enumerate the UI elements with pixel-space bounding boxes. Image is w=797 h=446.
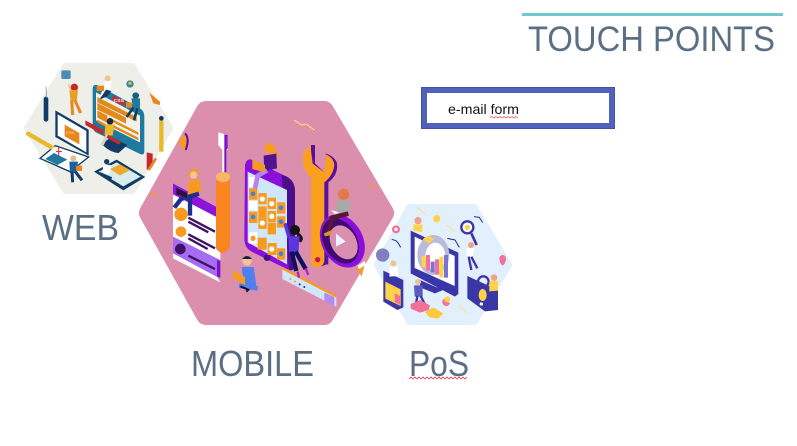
briefcase bbox=[467, 276, 498, 311]
heading: mobile: MOBILE bbox=[191, 343, 314, 384]
small icons bbox=[433, 215, 440, 222]
heading: pos: PoS bbox=[409, 343, 469, 384]
left app card bbox=[173, 183, 220, 278]
panel: mobile hexagon bbox=[149, 111, 384, 315]
magnifier bbox=[311, 207, 374, 275]
calculator bbox=[383, 271, 403, 310]
panel: pos hexagon bbox=[376, 207, 508, 321]
tablet bbox=[94, 160, 145, 190]
red books bbox=[147, 152, 153, 170]
callout: e-mail form box bbox=[421, 87, 615, 129]
panel: web hexagon bbox=[28, 67, 169, 190]
icon: point of sale illustration bbox=[376, 207, 506, 319]
man bbox=[415, 279, 421, 285]
laptop bbox=[55, 110, 89, 156]
phone bbox=[244, 159, 295, 270]
icon: mobile app illustration bbox=[150, 120, 375, 307]
figures bbox=[61, 70, 140, 182]
woman on monitor bbox=[414, 217, 422, 224]
confetti bbox=[294, 121, 314, 131]
pencils and tools bbox=[28, 134, 53, 148]
heading: web: WEB bbox=[42, 207, 119, 248]
people bbox=[174, 143, 350, 292]
woman bbox=[468, 242, 474, 248]
icon: web development illustration: CSS bbox=[114, 98, 125, 104]
title: touch points: TOUCH POINTS bbox=[528, 20, 775, 59]
puzzle pieces bbox=[411, 300, 430, 313]
wrench bbox=[311, 145, 337, 268]
icon: web development illustration bbox=[28, 70, 164, 190]
magnifier bbox=[461, 221, 473, 233]
monitor bbox=[411, 231, 458, 297]
callout: e-mail form box: e-mail form bbox=[448, 101, 519, 117]
search bar bbox=[282, 267, 336, 307]
screwdriver bbox=[218, 132, 228, 177]
icon: web development illustration: HTML bbox=[66, 131, 75, 135]
monitor bbox=[93, 85, 144, 154]
